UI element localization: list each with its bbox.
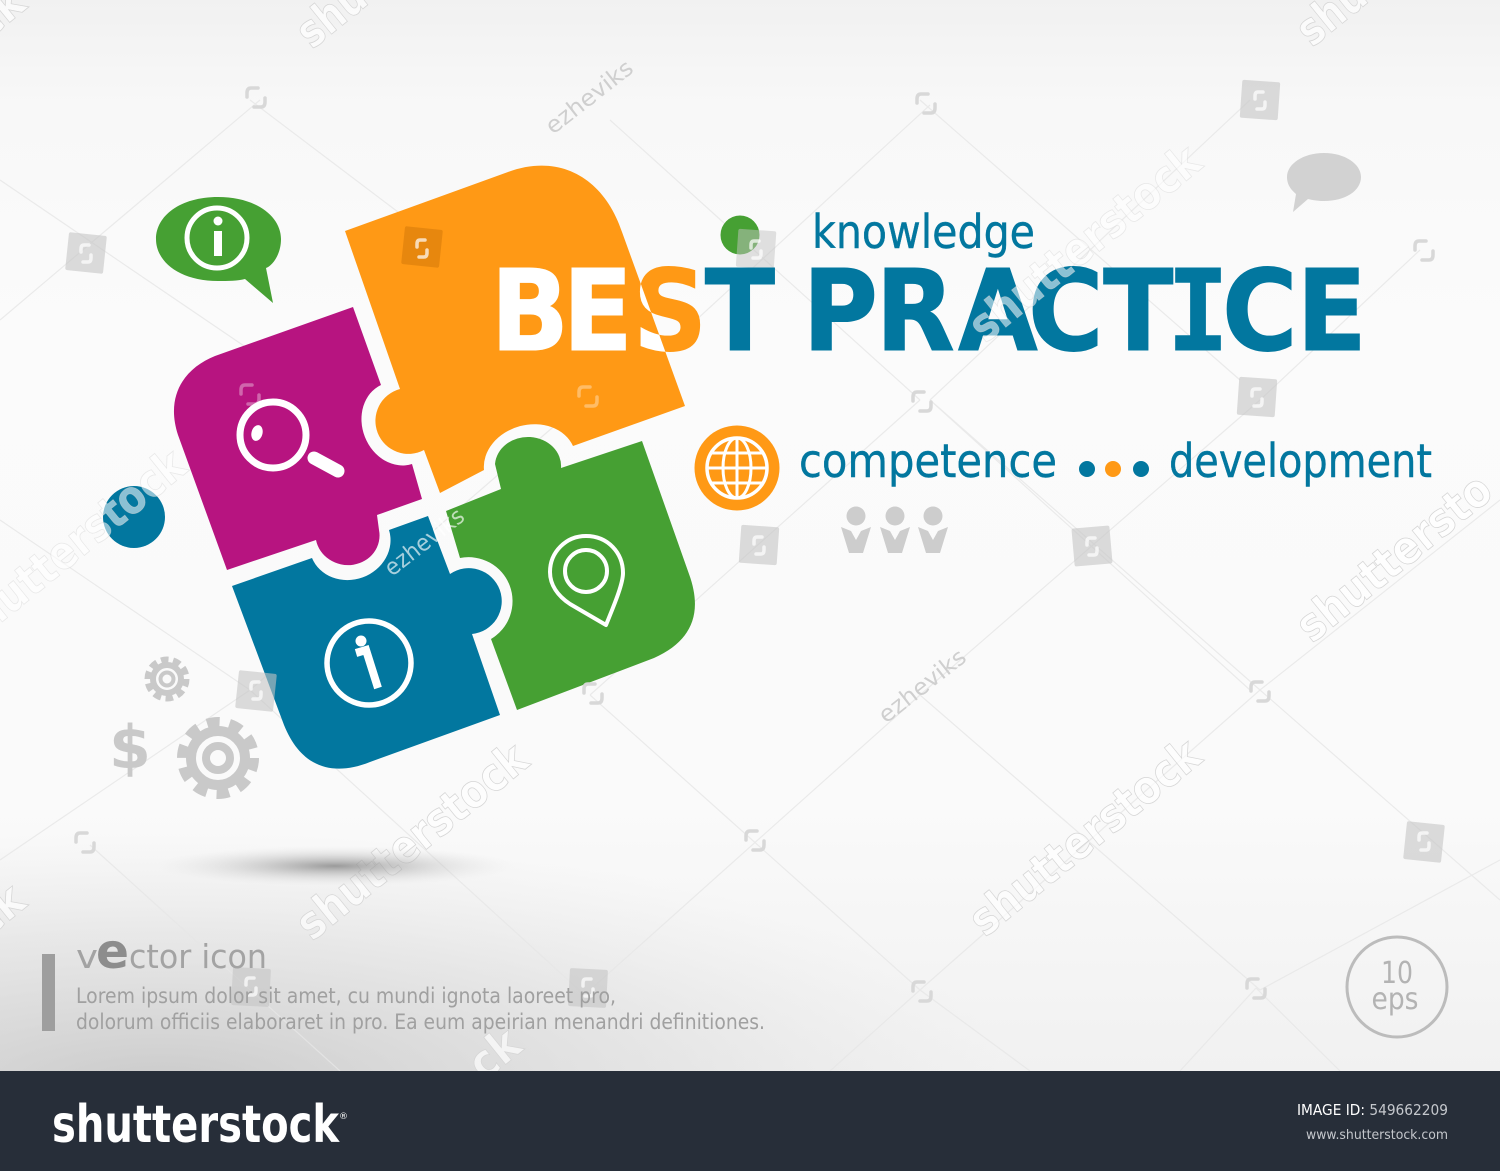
puzzle: magenta piece xyxy=(174,307,422,570)
badge: 10 eps: eps xyxy=(1372,982,1418,1017)
heading: BEST PRACTICE: C xyxy=(1028,247,1104,377)
icon: large gear xyxy=(184,724,252,792)
three dots xyxy=(1079,461,1149,477)
heading: BEST PRACTICE: E xyxy=(562,247,633,377)
heading: BEST PRACTICE: I xyxy=(1167,247,1229,377)
icon: green info speech bubble xyxy=(156,197,281,303)
icon: orange globe xyxy=(694,426,780,510)
badge: 10 eps xyxy=(1347,937,1447,1037)
heading: vector icon: v xyxy=(76,937,98,976)
watermarks: shutterstock text: ck xyxy=(457,1015,532,1091)
puzzle: blue piece xyxy=(232,516,502,769)
watermark outline marks xyxy=(76,88,1433,1001)
watermarks: ezheviks text xyxy=(541,55,972,729)
heading: vector icon: ctor icon xyxy=(129,937,267,976)
heading: BEST PRACTICE: P xyxy=(803,247,878,377)
watermarks: shutterstock text: shutterstock xyxy=(285,730,539,951)
text block: lorem ipsum: Lorem ipsum dolor sit amet, cu mundi ignota laoreet pro, xyxy=(76,984,616,1008)
shadow under puzzle xyxy=(155,846,515,886)
heading: BEST PRACTICE: S xyxy=(633,247,707,377)
badge: 10 eps: 10 xyxy=(1381,956,1413,991)
watermark marks on orange and magenta pieces xyxy=(241,385,597,406)
icon: info on blue piece xyxy=(327,621,411,705)
icon: three people xyxy=(841,506,948,553)
heading: BEST PRACTICE xyxy=(500,266,1360,352)
icon: grey speech bubble xyxy=(1287,153,1361,212)
watermark: ezheviks over puzzle: ezheviks xyxy=(380,503,470,582)
heading: BEST PRACTICE: B xyxy=(491,247,569,377)
watermarks: ezheviks text: ezheviks xyxy=(874,644,972,729)
footer: site url: www.shutterstock.com xyxy=(1306,1127,1448,1143)
watermarks: shutterstock text: shutterstock xyxy=(958,726,1212,947)
decorative blue circle xyxy=(103,486,165,548)
text: development: development xyxy=(1169,434,1432,488)
text: competence: competence xyxy=(799,434,1057,488)
vertical bar xyxy=(42,954,55,1031)
watermark squares xyxy=(65,80,1445,1008)
icon: magnifier xyxy=(240,402,338,471)
heading: BEST PRACTICE: R xyxy=(875,247,955,377)
decorative green circle xyxy=(720,216,760,254)
heading: BEST PRACTICE: E xyxy=(1296,247,1367,377)
watermark over heading: shutterstock xyxy=(958,132,1212,353)
heading: vector icon: e xyxy=(96,924,129,980)
heading: BEST PRACTICE: S xyxy=(633,247,707,377)
icon: dollar sign: $ xyxy=(109,713,151,783)
heading: BEST PRACTICE: T xyxy=(1103,247,1173,377)
text block: lorem ipsum: dolorum officiis elaboraret in pro. Ea eum apeirian menandri definitiones. xyxy=(76,1010,765,1034)
footer logo: shutterstock: shutterstock xyxy=(52,1095,340,1155)
footer: image id: IMAGE ID: 549662209 xyxy=(1297,1101,1448,1119)
icon: small gear xyxy=(149,661,185,697)
watermark square glyph marks xyxy=(81,92,1429,996)
heading: BEST PRACTICE: C xyxy=(1222,247,1298,377)
text block: lorem ipsum xyxy=(76,984,765,1034)
heading: BEST PRACTICE: T xyxy=(705,247,775,377)
watermarks: ezheviks text: ezheviks xyxy=(541,55,639,140)
footer mark: registered: ® xyxy=(339,1112,348,1122)
heading: BEST PRACTICE: A xyxy=(958,247,1038,377)
icon: location pin xyxy=(550,536,623,625)
puzzle: green piece xyxy=(446,437,695,710)
heading: vector icon xyxy=(76,924,267,980)
heading: knowledge: knowledge xyxy=(812,205,1035,259)
puzzle: orange piece xyxy=(345,166,685,493)
footer bar xyxy=(0,1071,1500,1171)
